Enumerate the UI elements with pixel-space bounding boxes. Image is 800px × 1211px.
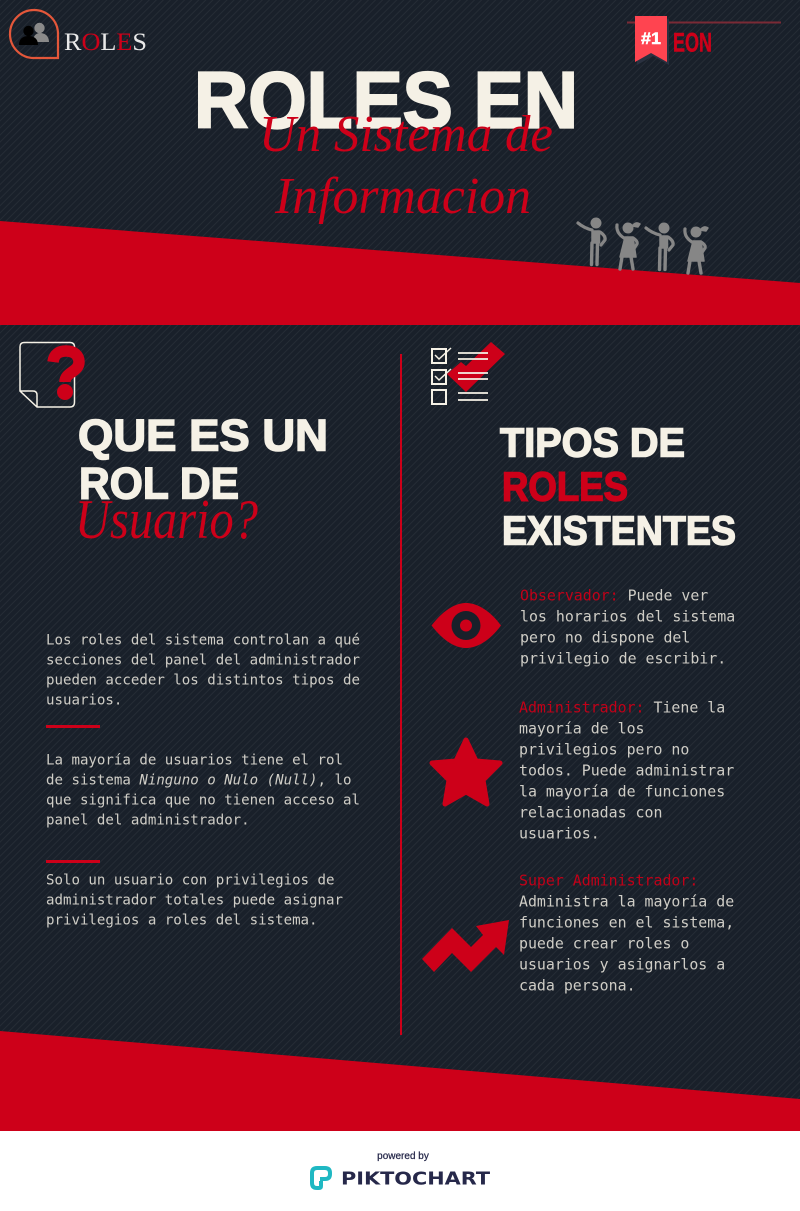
text block: null role: La mayoría de usuarios tiene el rol [46,752,343,768]
text block: administrador: Administrador: Tiene la [519,698,725,716]
heading: tipos de roles existentes: EXISTENTES [502,508,736,554]
heading: que es un rol de usuario: QUE ES UN [78,412,328,460]
badge: #1 EON: EON [673,28,712,58]
text block: super administrador: puede crear roles o [519,934,689,952]
text block: administrador: privilegios pero no [519,740,689,758]
text block: null role [46,752,360,828]
center divider [400,354,402,1035]
text block: null role: panel del administrador. [46,812,250,828]
text block: intro: Los roles del sistema controlan a qué [46,632,360,648]
wordmark: PIKTOCHART [341,1168,491,1190]
text block: super administrador [519,872,734,994]
text block: privileges: privilegios a roles del sistema. [46,912,318,928]
text block: administrador: usuarios. [519,824,600,842]
heading: tipos de roles existentes [500,420,736,554]
text block: super administrador: usuarios y asignarlos a [519,956,725,974]
rule 2 [46,860,100,863]
text block: intro [46,632,360,708]
text block: administrador: relacionadas con [519,804,662,822]
text block: intro: usuarios. [46,692,122,708]
badge: #1 EON [627,16,781,65]
text block: administrador [519,698,734,842]
text block: null role: que significa que no tienen acceso al [46,792,360,808]
header red slanted band [0,221,800,325]
rule 1 [46,725,100,728]
heading: que es un rol de usuario: Usuario? [75,489,258,551]
title script line 1: Un Sistema de [259,106,553,163]
title script line 2: Informacion [274,168,531,225]
heading: tipos de roles existentes: TIPOS DE [500,420,685,466]
icon: teardrop with users [10,10,58,58]
text block: observador: pero no dispone del [520,628,690,646]
text block: administrador: la mayoría de funciones [519,782,725,800]
icon: note with question mark [20,342,79,407]
text block: administrador: todos. Puede administrar [519,762,734,780]
panel: que es un rol [20,342,360,928]
title main line: ROLES EN [194,56,578,144]
logo wordmark: ROLES [64,29,147,56]
text block: observador: los horarios del sistema [520,608,735,626]
panel: tipos de roles [422,342,736,994]
text block: privileges: administrador totales puede asignar [46,892,343,908]
title [194,56,578,225]
logo: roles [10,10,147,58]
text block: administrador: mayoría de los [519,720,645,738]
icon: eye [432,603,501,648]
text block: null role: de sistema Ninguno o Nulo (Null), lo [46,772,352,788]
text block: intro: secciones del panel del administrador [46,652,360,668]
text block: super administrador: funciones en el sistema, [519,914,734,932]
badge: #1 EON: #1 [641,29,661,48]
text block: super administrador: Administra la mayoría de [519,892,734,910]
icon: checklist [432,342,505,404]
text block: observador: privilegio de escribir. [520,650,726,668]
heading: tipos de roles existentes: ROLES [502,464,628,510]
text block: super administrador: cada persona. [519,976,636,994]
icon: star [432,740,500,804]
text block: observador: Observador: Puede ver [520,586,708,604]
icon: rising arrow [422,920,509,972]
text block: privileges [46,872,343,928]
heading: que es un rol de usuario [75,412,328,551]
text block: intro: pueden acceder los distintos tipos de [46,672,360,688]
text block: observador [520,586,735,668]
footer red slanted band [0,1031,800,1131]
footer: powered by piktochart [312,1151,491,1190]
text block: privileges: Solo un usuario con privilegios de [46,872,334,888]
icon: piktochart logo [312,1168,330,1188]
heading: que es un rol de usuario: ROL DE [79,460,239,508]
text block: super administrador: Super Administrador: [519,872,698,890]
footer: powered by piktochart: powered by [377,1151,429,1162]
icon: group of people waving [578,218,708,273]
